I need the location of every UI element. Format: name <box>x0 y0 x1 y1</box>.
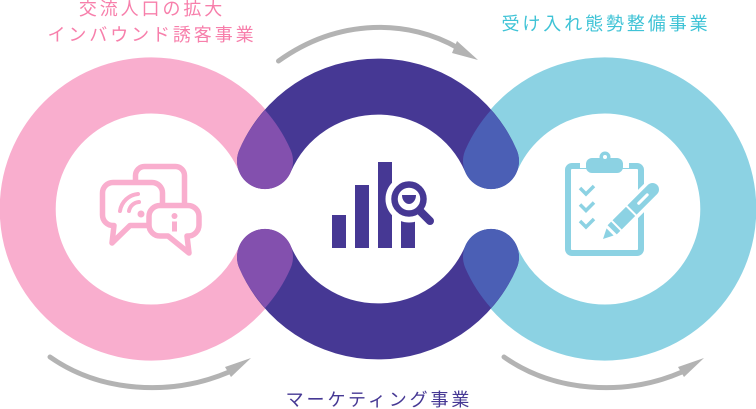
ring: pink inbound tourism <box>28 86 265 333</box>
heading: reception: 受け入れ態勢整備事業 <box>502 14 710 34</box>
arrow: top <box>278 27 478 61</box>
ring: light blue reception <box>491 86 728 332</box>
arrow: bottom right <box>504 357 704 388</box>
ring: indigo marketing <box>265 87 491 331</box>
icon: bar chart with magnifier <box>332 162 432 248</box>
overlap: pink and indigo <box>237 110 293 308</box>
icon: chat bubbles <box>102 166 199 253</box>
icon: clipboard with pen <box>568 152 667 253</box>
arrow: bottom left <box>50 357 251 388</box>
heading: inbound tourism: インバウンド誘客事業 <box>48 25 256 45</box>
overlap: indigo and light blue <box>463 110 519 308</box>
